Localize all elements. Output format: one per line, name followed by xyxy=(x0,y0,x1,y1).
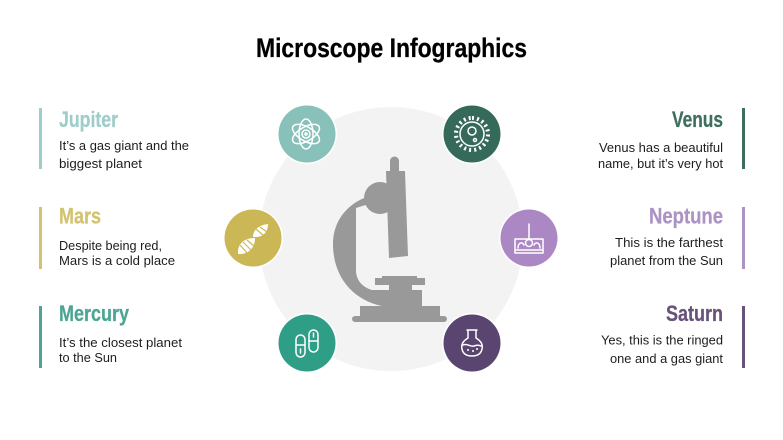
panel: Venus: name, but it’s very hot xyxy=(598,156,723,171)
icon: hair follicle xyxy=(499,208,559,268)
panel: Jupiter: biggest planet xyxy=(59,156,142,171)
panel: Mars: Mars xyxy=(59,204,101,228)
panel: Saturn: Yes, this is the ringed xyxy=(601,332,723,348)
panel: Venus: Venus xyxy=(672,107,723,132)
panel: Mercury: Mercury xyxy=(59,301,130,326)
icon: atom xyxy=(277,104,337,164)
panel: Venus xyxy=(598,107,745,171)
icon: DNA xyxy=(223,208,283,268)
title: Microscope Infographics xyxy=(256,33,527,63)
panel: Mars: Despite being red, xyxy=(59,238,162,253)
panel: Mercury: to the Sun xyxy=(59,350,117,365)
panel: Mars xyxy=(39,204,175,269)
panel: Neptune: planet from the Sun xyxy=(610,253,723,268)
panel: Saturn: Saturn xyxy=(666,301,723,326)
icon: flask xyxy=(442,313,502,373)
panel: Saturn xyxy=(601,301,745,368)
panel: Venus: Venus has a beautiful xyxy=(599,140,723,155)
panel: Neptune: Neptune xyxy=(649,204,723,228)
icon: pills xyxy=(277,313,337,373)
panel: Mars: Mars is a cold place xyxy=(59,253,175,268)
panel: Neptune xyxy=(610,204,745,269)
background circle xyxy=(259,107,523,371)
panel: Mercury xyxy=(39,301,182,368)
panel: Jupiter: It’s a gas giant and the xyxy=(59,138,189,153)
microscope xyxy=(333,156,447,322)
panel: Jupiter: Jupiter xyxy=(59,107,118,132)
panel: Mercury: It’s the closest planet xyxy=(59,335,182,350)
panel: Jupiter xyxy=(39,107,189,171)
icon: bacterium xyxy=(442,104,502,164)
panel: Saturn: one and a gas giant xyxy=(610,351,723,366)
panel: Neptune: This is the farthest xyxy=(615,235,723,250)
